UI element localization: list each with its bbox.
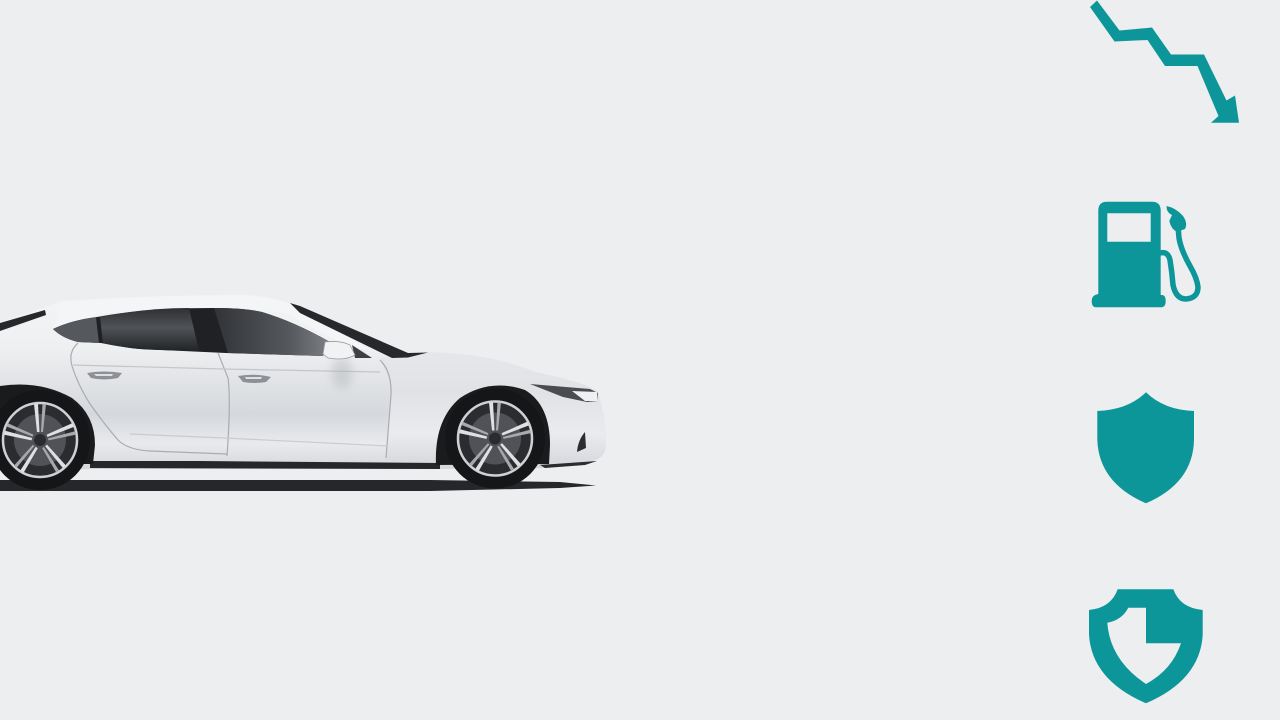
rear wheel arch: [0, 384, 95, 464]
front lip: [540, 461, 597, 468]
ground shadow: [0, 480, 596, 491]
pump hose: [1160, 226, 1198, 299]
car illustration: [0, 295, 606, 491]
front wing panel: [380, 352, 606, 468]
pump nozzle: [1167, 206, 1186, 232]
icon: falling arrow: [1090, 0, 1239, 123]
mirror shadow: [332, 357, 352, 389]
window corner triangle: [352, 345, 372, 358]
pump body and base: [1092, 202, 1166, 307]
rear deck vent: [0, 310, 46, 331]
front air intake: [577, 432, 586, 452]
headlight: [530, 384, 598, 402]
rear door handle: [87, 372, 122, 380]
rear quarter window: [53, 318, 99, 343]
roof rail highlight: [53, 296, 370, 350]
door lines: [71, 343, 391, 458]
front side window: [214, 308, 330, 356]
front wheel: [445, 388, 545, 488]
car body: [0, 295, 606, 470]
windshield strip: [290, 303, 428, 358]
icon: fuel pump: [1092, 202, 1198, 307]
rear side window: [100, 308, 199, 351]
front door handle: [238, 375, 271, 383]
icon: outlined shield with quarter segment: [1089, 589, 1203, 703]
front wheel arch: [436, 386, 550, 465]
side mirror: [323, 341, 355, 359]
side sill: [90, 461, 440, 469]
rear wheel: [0, 390, 90, 490]
window backing: [53, 308, 330, 356]
icon: solid shield: [1097, 392, 1194, 503]
